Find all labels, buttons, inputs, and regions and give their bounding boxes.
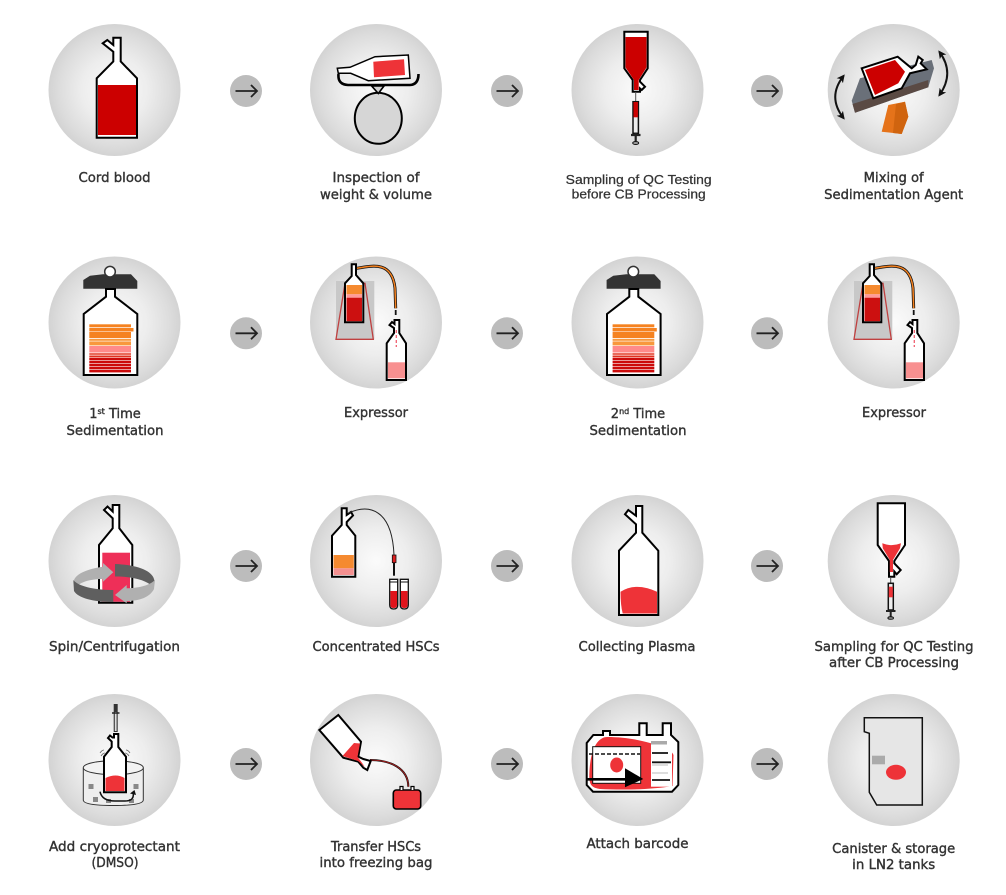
label: (DMSO) [92, 856, 138, 871]
label: Attach barcode [586, 837, 688, 852]
label: Cord blood [78, 171, 150, 186]
disc [828, 495, 960, 627]
icon: bag and syringe [878, 503, 905, 619]
arrow [751, 748, 783, 780]
arrow [491, 748, 523, 780]
label: Add cryoprotectant [49, 840, 180, 855]
arrow [230, 75, 262, 107]
step: canister and storage [828, 694, 960, 873]
icon: expressor [336, 264, 406, 380]
label: into freezing bag [320, 856, 432, 871]
icon: bag in beaker [83, 704, 143, 806]
label: Canister & storage [832, 842, 955, 857]
label: Expressor [862, 406, 927, 421]
step: transfer HSCs [310, 694, 442, 871]
disc [48, 24, 180, 156]
label: Sampling for QC Testing [814, 640, 974, 655]
label: Transfer HSCs [330, 840, 421, 855]
label: Expressor [344, 406, 409, 421]
label: Time [629, 407, 665, 422]
label: 2 [611, 407, 619, 422]
disc [572, 495, 704, 627]
icon: bag under clamp [607, 266, 661, 375]
arrow [491, 317, 523, 349]
step: attach barcode [572, 694, 704, 852]
label: Sampling of QC Testing [566, 172, 712, 187]
disc [310, 495, 442, 627]
icon: bag under clamp [83, 266, 137, 375]
disc [572, 694, 704, 826]
icon: expressor [854, 264, 924, 380]
label: Sedimentation [66, 424, 164, 439]
disc [572, 256, 704, 388]
arrow [751, 550, 783, 582]
label: Time [105, 407, 141, 422]
step: first sedimentation [48, 256, 180, 439]
icon: blood bag [97, 38, 137, 138]
label: Sedimentation Agent [824, 188, 963, 203]
arrow [230, 748, 262, 780]
label: after CB Processing [829, 656, 959, 671]
label: Inspection of [332, 171, 420, 186]
step: centrifugation [48, 495, 180, 655]
arrow [491, 550, 523, 582]
disc [48, 495, 180, 627]
label: Sedimentation [590, 424, 686, 439]
icon: bag to freezing bag [319, 715, 421, 809]
disc [572, 24, 704, 156]
step: sampling after processing [814, 495, 974, 671]
label: Collecting Plasma [578, 640, 696, 655]
arrow [230, 550, 262, 582]
icon: scale with bag [337, 55, 418, 144]
label: before CB Processing [572, 187, 706, 202]
step: cord blood [48, 24, 180, 186]
label: weight & volume [320, 188, 432, 203]
step: second sedimentation [572, 256, 704, 439]
icon: bag, tube, vials [332, 508, 408, 609]
disc [828, 256, 960, 388]
step: collecting plasma [572, 495, 704, 655]
arrow [751, 75, 783, 107]
arrow [751, 317, 783, 349]
label: Spin/Centrifugation [49, 640, 180, 655]
icon: bag with plasma [619, 506, 658, 615]
disc [310, 694, 442, 826]
icon: canister [864, 718, 922, 805]
label: nd [619, 407, 629, 416]
step: mixing [824, 24, 963, 203]
disc [310, 24, 442, 156]
icon: spinning bag [73, 505, 155, 603]
label: in LN2 tanks [852, 858, 935, 873]
label: Concentrated HSCs [312, 640, 440, 655]
step: expressor [828, 256, 960, 421]
arrow [491, 75, 523, 107]
step: inspection [310, 24, 442, 203]
arrow [230, 317, 262, 349]
step: add cryoprotectant [48, 694, 180, 871]
step: sampling before processing [566, 24, 712, 202]
disc [310, 256, 442, 388]
step: expressor [310, 256, 442, 421]
label: Mixing of [864, 171, 924, 186]
icon: labelled bag [587, 723, 678, 792]
icon: rocker with bag [835, 52, 947, 134]
icon: bag and syringe [624, 32, 648, 145]
disc [828, 694, 960, 826]
label: st [98, 407, 105, 416]
disc [828, 24, 960, 156]
label: 1 [89, 407, 98, 422]
disc [48, 694, 180, 826]
step: concentrated HSCs [310, 495, 442, 655]
disc [48, 256, 180, 388]
